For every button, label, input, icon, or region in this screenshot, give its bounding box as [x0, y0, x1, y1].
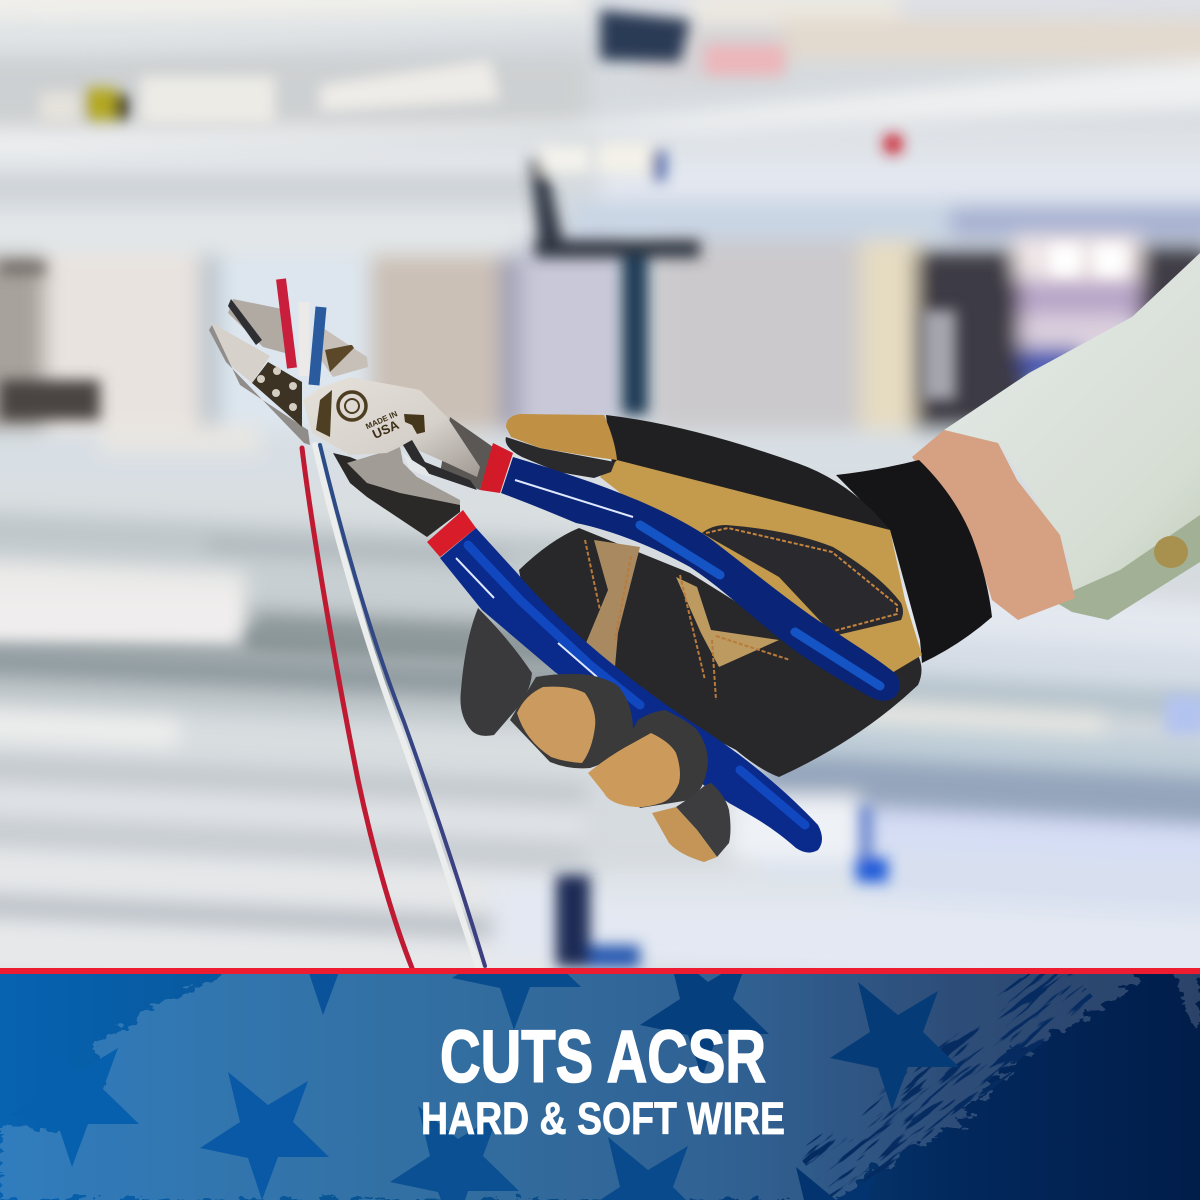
- engraved stars: [257, 367, 297, 411]
- soldier emblem: [404, 414, 425, 434]
- shirt sleeve: [944, 253, 1200, 620]
- made in usa engraving: USA: [370, 417, 402, 442]
- banner background: [0, 974, 1200, 1200]
- lower blue handle: [440, 528, 822, 853]
- jaw side edge: [209, 325, 310, 445]
- flag stars: [60, 974, 959, 1200]
- front jaw: [210, 322, 270, 383]
- brown engraved stripe: [316, 390, 332, 437]
- upper red sleeve: [480, 443, 513, 493]
- red rule: [0, 968, 1200, 974]
- work glove: [460, 415, 992, 777]
- upper jaw rear: [228, 299, 287, 353]
- wires below pliers: [302, 445, 485, 968]
- red wire strand: [302, 448, 412, 968]
- upper blue handle: [501, 457, 900, 701]
- upper handle glint: [515, 480, 633, 517]
- made in usa engraving: MADE IN: [364, 409, 399, 431]
- cutter jaw teeth: [403, 440, 477, 490]
- white wire top: [298, 302, 310, 376]
- knit back of hand: [606, 415, 890, 530]
- under thumb dark: [506, 437, 615, 478]
- brush stroke texture: [0, 960, 1200, 1200]
- blue wire strand: [320, 445, 485, 966]
- pliers main head: [303, 377, 480, 477]
- finger three rim: [610, 710, 708, 808]
- thumb tan tip: [506, 414, 617, 460]
- lower handle glint: [456, 558, 597, 677]
- palm tan panel right: [676, 577, 779, 667]
- bottom banner: [0, 968, 1200, 1200]
- lower palm: [519, 528, 922, 777]
- engraved logo: [338, 392, 366, 420]
- subheading: HARD & SOFT WIRE: [421, 1093, 785, 1144]
- pliers: [209, 279, 513, 557]
- glove cuff: [836, 460, 992, 663]
- cuff button: [1154, 536, 1188, 568]
- lower head dark: [333, 453, 460, 537]
- tan leather strip: [600, 460, 922, 680]
- palm tan panel left: [586, 540, 640, 667]
- flag stars panel: [252, 362, 302, 427]
- lower red sleeve: [427, 510, 476, 557]
- upper jaw brown mark: [325, 345, 354, 372]
- neck: [440, 417, 493, 490]
- made in usa engraving: [364, 409, 404, 443]
- upper jaw right: [321, 328, 368, 377]
- banner texture: [0, 950, 1200, 1200]
- palm stitching: [585, 540, 790, 700]
- finger one: [460, 608, 532, 736]
- cuff edge shading: [1052, 515, 1200, 620]
- finger four rim: [676, 783, 730, 857]
- lower head steel: [347, 447, 460, 505]
- cutter gap showing background: [402, 452, 432, 478]
- heading: CUTS ACSR: [440, 1015, 766, 1098]
- pad stitching: [706, 528, 897, 632]
- finger four pad: [652, 807, 717, 862]
- upper handle highlight: [640, 525, 880, 686]
- white wire core: [315, 445, 478, 966]
- finger two rim: [510, 674, 633, 768]
- brush speckle: [802, 974, 1092, 1196]
- lower handle highlight: [468, 545, 805, 825]
- finger three pad: [588, 733, 680, 807]
- gripping fingers: [510, 674, 730, 862]
- red wire top: [281, 279, 292, 368]
- jaw teeth: [228, 299, 262, 345]
- blue wire top: [314, 307, 321, 385]
- finger two pad: [517, 687, 595, 763]
- hex grip pad: [702, 525, 903, 637]
- thumb: [506, 414, 617, 478]
- wrist: [912, 430, 1075, 620]
